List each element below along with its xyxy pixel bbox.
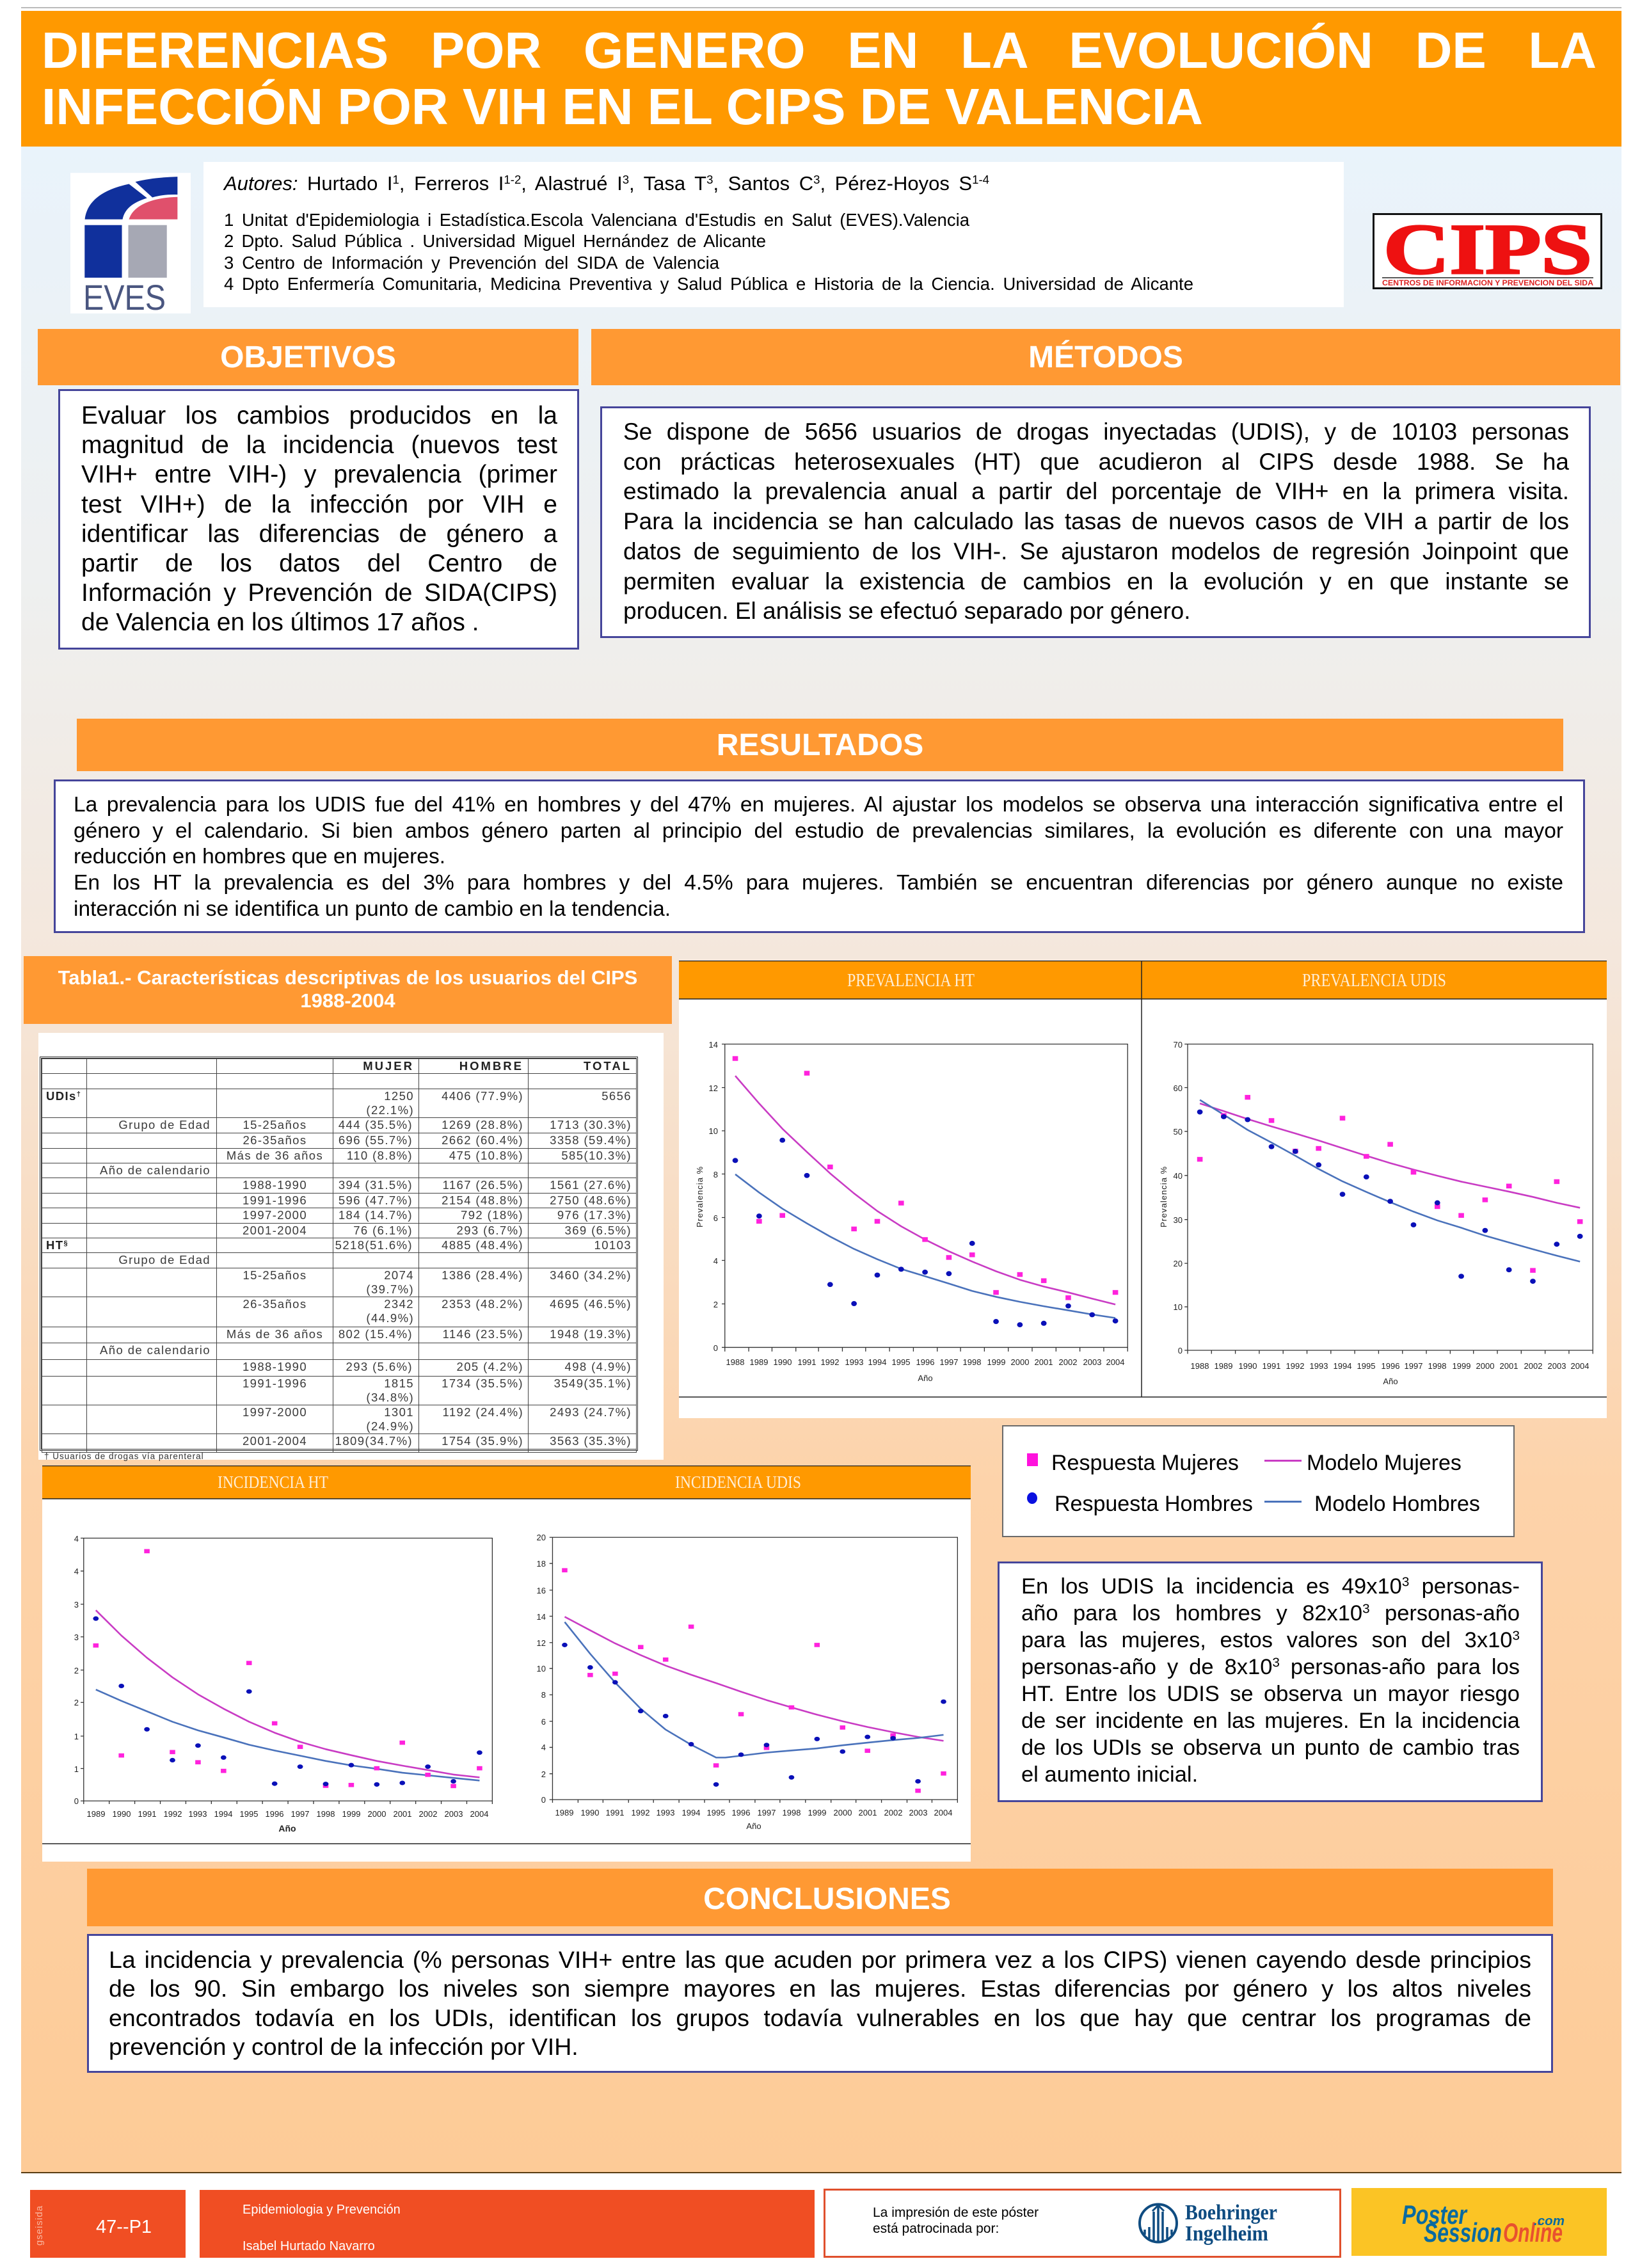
chart: incidencia UDIS: Año [746,1821,761,1831]
text: objetivos: identificar las diferencias de género a [81,520,557,548]
chart: prevalencia UDIS: 60 [1174,1083,1183,1093]
table section: HT: 1146 (23.5%) [443,1327,523,1341]
text: métodos: estimado la prevalencia anual a partir del porcentaje de VIH+ en la primera visita. [623,478,1569,504]
text: conclusiones [109,1946,1531,2060]
chart: prevalencia UDIS: 0 [1178,1346,1183,1355]
panel title: incidencia HT: INCIDENCIA HT [218,1473,328,1492]
table section: UDIs: 792 (18%) [461,1208,523,1222]
chart: incidencia HT: 0 [74,1796,79,1806]
table section: HT: 1386 (28.4%) [442,1268,523,1282]
chart: incidencia UDIS: 1997 [758,1808,776,1817]
table section: UDIs: 1988-1990 [243,1178,307,1192]
chart: prevalencia HT: Prevalencia % [695,1166,705,1227]
heading: tabla 1 [24,956,672,1024]
chart: incidencia UDIS: 1990 [581,1808,599,1817]
chart: incidencia HT: 2 [74,1666,79,1675]
text: métodos: permiten evaluar la existencia de cambios en la evolución y en que instante se [623,568,1569,595]
chart: prevalencia HT: 1995 [892,1357,910,1367]
text: incidencia explanation: HT. Entre los UDIS se observa un mayor riesgo [1021,1682,1520,1706]
chart: incidencia UDIS: 2000 [834,1808,852,1817]
chart: prevalencia UDIS: 1988 [1191,1361,1209,1371]
session code: 47--P1 [96,2217,152,2237]
chart: incidencia UDIS: 20 [537,1533,546,1542]
chart: prevalencia HT: 2001 [1035,1357,1053,1367]
chart: prevalencia HT: 6 [713,1213,718,1223]
table section: UDIs: 596 (47.7%) [339,1194,413,1207]
chart: incidencia UDIS: 2001 [859,1808,877,1817]
table section: HT: 3549(35.1%) [554,1377,632,1390]
panel title: prevalencia HT: PREVALENCIA HT [847,970,975,991]
text: resultados [74,793,1563,921]
text: conclusiones: La incidencia y prevalencia (% personas VIH+ entre las que acuden por primera vez a los CIPS) vienen cayendo desde principios [109,1946,1531,1973]
chart: prevalencia UDIS: 1993 [1310,1361,1328,1371]
chart: prevalencia UDIS: 1989 [1215,1361,1232,1371]
author: Isabel Hurtado Navarro [243,2239,375,2253]
table section: UDIs: 2154 (48.8%) [442,1194,523,1207]
chart: incidencia HT: Año [278,1823,296,1833]
table section: UDIs: 2662 (60.4%) [442,1133,523,1147]
panel: tabla 1 [38,1033,664,1460]
table section: UDIs: 1561 (27.6%) [550,1178,632,1192]
chart: incidencia UDIS: 1993 [657,1808,674,1817]
logo: Boehringer Ingelheim [1136,2198,1283,2249]
chart: incidencia HT: 2001 [394,1809,411,1819]
table section: UDIs: 3358 (59.4%) [550,1133,632,1147]
text: objetivos: de Valencia en los últimos 17 años . [81,609,479,636]
logo: PosterSessionOnline: .com [1534,2214,1565,2228]
text: objetivos: partir de los datos del Centro de [81,550,557,577]
chart: prevalencia HT: 1988 [726,1357,744,1367]
table section: HT: 2353 (48.2%) [442,1297,523,1311]
table section: HT: HT§ [46,1238,68,1252]
text: métodos: datos de seguimiento de los VIH-. Se ajustaron modelos de regresión Joinpoint que [623,538,1569,564]
authors panel [203,162,1344,307]
chart: incidencia UDIS: 2004 [934,1808,952,1817]
panel: resultados [54,779,1585,933]
text: resultados: interacción ni se identifica un punto de cambio en la tendencia. [74,897,671,921]
text: incidencia explanation: para las mujeres, estos valores son del 3x103 [1021,1628,1520,1652]
chart: incidencia HT: 2003 [445,1809,463,1819]
chart: prevalencia UDIS: 2001 [1500,1361,1518,1371]
chart: prevalencia UDIS: 2004 [1571,1361,1589,1371]
text: objetivos: Información y Prevención de SIDA(CIPS) [81,579,557,607]
table section: HT: 2342 (44.9%) [366,1297,414,1325]
sponsor text: está patrocinada por: [873,2221,999,2236]
chart: incidencia HT: 1999 [342,1809,360,1819]
heading: objetivos [38,329,578,385]
chart: incidencia UDIS: 8 [541,1690,546,1700]
vertical session label: gseisida [34,2205,45,2246]
chart: prevalencia HT: 2000 [1011,1357,1029,1367]
table section: UDIs: 444 (35.5%) [339,1118,413,1131]
table header: HOMBRE [459,1059,523,1073]
chart: prevalencia HT: Año [918,1373,933,1383]
heading: métodos: MÉTODOS [1028,340,1183,374]
chart: prevalencia HT: 1989 [750,1357,768,1367]
affiliations: 3 Centro de Información y Prevención del SIDA de Valencia [224,253,719,273]
table section: UDIs: Grupo de Edad [118,1118,211,1131]
chart: prevalencia HT: 10 [709,1126,718,1136]
chart: incidencia UDIS: 4 [541,1743,546,1752]
chart: incidencia HT: 1993 [189,1809,207,1819]
text: conclusiones: de los 90. Sin embargo los niveles son siempre mayores en las mujeres. Estas diferencias por género y los altos niveles [109,1975,1531,2002]
chart: incidencia UDIS: 2002 [884,1808,902,1817]
table section: UDIs: 1269 (28.8%) [442,1118,523,1131]
text: resultados: género y el calendario. Si bien ambos género parten al principio del estudio de prevalencias similares, la evolución es diferente con una mayor [74,819,1563,843]
chart: prevalencia UDIS: 1995 [1357,1361,1375,1371]
heading: tabla 1: 1988-2004 [300,989,395,1012]
table section: UDIs: 696 (55.7%) [339,1133,413,1147]
text: incidencia explanation: el aumento inicial. [1021,1762,1198,1787]
heading: resultados: RESULTADOS [717,728,923,762]
chart: prevalencia HT: 2002 [1059,1357,1077,1367]
table section: UDIs: 1991-1996 [243,1194,307,1207]
chart: prevalencia UDIS: 1999 [1453,1361,1470,1371]
affiliations: 2 Dpto. Salud Pública . Universidad Miguel Hernández de Alicante [224,231,766,251]
table section: HT: Más de 36 años [227,1327,323,1341]
chart panel: incidencia [42,1465,971,1862]
text: objetivos [81,402,557,636]
table section: UDIs: 26-35años [243,1133,307,1147]
chart: prevalencia HT: 1999 [987,1357,1005,1367]
chart: incidencia UDIS: 10 [537,1664,546,1673]
text: objetivos: Evaluar los cambios producidos en la [81,402,557,429]
chart: incidencia HT: 1990 [113,1809,131,1819]
table section: UDIs: 475 (10.8%) [449,1149,523,1162]
table section: HT: 1815 (34.8%) [366,1377,414,1404]
legend marker and label: respuesta mujeres: Respuesta Mujeres [1051,1451,1239,1475]
sponsor text [873,2205,1039,2237]
chart: incidencia UDIS: 1994 [682,1808,700,1817]
panel: métodos [600,406,1591,638]
chart: prevalencia UDIS: 40 [1174,1171,1183,1181]
table section: HT: 802 (15.4%) [339,1327,413,1341]
chart: incidencia UDIS [537,1533,957,1831]
chart: prevalencia HT: 1997 [940,1357,958,1367]
chart: incidencia HT: 2000 [368,1809,386,1819]
chart: incidencia HT: 1 [74,1732,79,1741]
chart: incidencia HT: 2002 [419,1809,437,1819]
chart: prevalencia UDIS: 1992 [1286,1361,1304,1371]
table section: HT: 2493 (24.7%) [550,1405,632,1419]
title text: INFECCIÓN POR VIH EN EL CIPS DE VALENCIA [42,78,1203,135]
chart: incidencia HT: 3 [74,1600,79,1609]
table section: HT: 4695 (46.5%) [550,1297,632,1311]
table footnote: † Usuarios de drogas vía parenteral [44,1451,204,1461]
table section: UDIs: 110 (8.8%) [347,1149,413,1162]
chart: prevalencia HT: 1998 [963,1357,981,1367]
chart: incidencia UDIS: 2 [541,1769,546,1779]
table section: HT: 2001-2004 [243,1434,307,1448]
table section: UDIs: 184 (14.7%) [339,1208,413,1222]
logo: EVES [70,173,191,314]
chart: prevalencia HT: 14 [709,1040,718,1050]
footer: topic and author [200,2190,815,2258]
text: conclusiones: encontrados todavía en los UDIs, identifican los grupos todavía vulnerables en los que hay que centrar los programas de [109,2004,1531,2031]
affiliations [224,210,1193,294]
text: resultados: La prevalencia para los UDIS fue del 41% en hombres y del 47% en mujeres. Al ajustar los modelos se observa una interacción significativa entre el [74,793,1563,817]
table section: UDIs: 2750 (48.6%) [550,1194,632,1207]
table section: UDIs: 976 (17.3%) [557,1208,632,1222]
logo: PosterSessionOnline: Session [1424,2217,1502,2248]
chart: incidencia HT: 4 [74,1567,79,1576]
chart: prevalencia HT: 0 [713,1343,718,1353]
footer: sponsor [824,2189,1341,2258]
chart: prevalencia HT: 1991 [798,1357,816,1367]
title banner [21,11,1621,147]
chart: incidencia UDIS: 2003 [909,1808,927,1817]
chart: incidencia HT: 1989 [87,1809,105,1819]
text: resultados: En los HT la prevalencia es del 3% para hombres y del 4.5% para mujeres. También se encuentran diferencias por género aunque no existe [74,871,1563,895]
heading: conclusiones: CONCLUSIONES [703,1881,951,1916]
chart: incidencia HT: 1997 [291,1809,309,1819]
chart: prevalencia HT: 2003 [1083,1357,1101,1367]
text: incidencia explanation: de los UDIs se observa un punto de cambio tras [1021,1736,1520,1760]
chart: prevalencia UDIS: 2002 [1524,1361,1542,1371]
chart: incidencia HT: 2 [74,1698,79,1707]
text: resultados: reducción en hombres que en mujeres. [74,845,445,868]
text: métodos: Para la incidencia se han calculado las tasas de nuevos casos de VIH a partir de los [623,508,1569,534]
chart: prevalencia UDIS: 10 [1174,1302,1183,1312]
chart: prevalencia UDIS: 30 [1174,1215,1183,1225]
legend marker and label: respuesta hombres: Respuesta Hombres [1055,1492,1253,1516]
table section: UDIs: 1713 (30.3%) [550,1118,632,1131]
text: incidencia explanation: año para los hombres y 82x103 personas-año [1021,1601,1520,1625]
table section: HT: 2074 (39.7%) [366,1268,414,1296]
table section: HT: 1192 (24.4%) [443,1405,523,1419]
title text: DIFERENCIAS POR GENERO EN LA EVOLUCIÓN DE LA [42,22,1597,79]
table section: HT: 1301 (24.9%) [366,1405,414,1433]
chart: incidencia HT [74,1534,492,1833]
legend line and label: modelo mujeres: Modelo Mujeres [1307,1451,1462,1475]
table section: HT: 1734 (35.5%) [442,1377,523,1390]
table section: UDIs: 4406 (77.9%) [442,1089,523,1103]
topic: Epidemiologia y Prevención [243,2203,401,2217]
table section: HT: 1997-2000 [243,1405,307,1419]
table section: HT: 3460 (34.2%) [550,1268,632,1282]
logo: Boehringer Ingelheim: Ingelheim [1185,2222,1268,2246]
table section: UDIs: 369 (6.5%) [564,1224,632,1237]
table header: TOTAL [584,1059,632,1073]
table header: MUJER [363,1059,414,1073]
chart: incidencia HT: 1995 [240,1809,258,1819]
table section: HT: 3563 (35.3%) [550,1434,632,1448]
chart: prevalencia HT [695,1040,1127,1383]
text: métodos: producen. El análisis se efectuó separado por género. [623,598,1191,624]
chart: incidencia UDIS: 1998 [783,1808,801,1817]
table section: UDIs: Año de calendario [100,1163,211,1177]
authors line: Autores: Hurtado I1, Ferreros I1-2, Alastrué I3, Tasa T3, Santos C3, Pérez-Hoyos S1-4 [224,172,989,195]
panel title: prevalencia UDIS: PREVALENCIA UDIS [1302,970,1446,991]
table section: UDIs: 293 (6.7%) [457,1224,523,1237]
text: objetivos: magnitud de la incidencia (nuevos test [81,431,557,459]
chart: prevalencia UDIS: 1996 [1382,1361,1399,1371]
chart: prevalencia UDIS: 20 [1174,1259,1183,1268]
chart: prevalencia UDIS: 1990 [1239,1361,1257,1371]
logo: CIPS: CENTROS DE INFORMACION Y PREVENCION DEL SIDA [1382,278,1593,287]
table section: HT: 1754 (35.9%) [442,1434,523,1448]
chart: incidencia HT: 1 [74,1764,79,1774]
chart: incidencia UDIS: 1991 [606,1808,624,1817]
chart: prevalencia UDIS: 2000 [1476,1361,1494,1371]
text: incidencia explanation: de ser incidente en las mujeres. En la incidencia [1021,1709,1520,1733]
table section: UDIs: 1997-2000 [243,1208,307,1222]
table section: HT: 4885 (48.4%) [442,1238,523,1252]
table section: UDIs [46,1089,632,1237]
chart: incidencia UDIS: 1995 [707,1808,725,1817]
chart: prevalencia HT: 2 [713,1300,718,1309]
chart: incidencia UDIS: 1989 [555,1808,573,1817]
chart: incidencia UDIS: 6 [541,1717,546,1727]
chart: incidencia UDIS: 12 [537,1638,546,1648]
chart: prevalencia UDIS: Prevalencia % [1159,1166,1168,1227]
table section: HT: 293 (5.6%) [346,1360,413,1373]
chart: prevalencia HT: 1992 [821,1357,839,1367]
table section: HT: 1991-1996 [243,1377,307,1390]
chart: incidencia UDIS: 1999 [808,1808,826,1817]
panel: conclusiones [87,1934,1553,2073]
chart: prevalencia UDIS: 50 [1174,1127,1183,1137]
chart: prevalencia HT: 1990 [774,1357,792,1367]
table section: UDIs: 1167 (26.5%) [443,1178,523,1192]
chart: incidencia HT: 3 [74,1633,79,1642]
chart: prevalencia HT: 12 [709,1083,718,1093]
title text [42,22,1597,135]
chart: incidencia HT: 1998 [317,1809,335,1819]
text: incidencia explanation: personas-año y de 8x103 personas-año para los [1021,1655,1520,1679]
text: métodos: con prácticas heterosexuales (HT) que acudieron al CIPS desde 1988. Se ha [623,449,1569,475]
table section: HT: 498 (4.9%) [564,1360,632,1373]
chart: prevalencia HT: 2004 [1106,1357,1124,1367]
table section: HT: Año de calendario [100,1343,211,1357]
heading: tabla 1: Tabla1.- Características descriptivas de los usuarios del CIPS [58,966,637,989]
table section: UDIs: 5656 [601,1089,632,1103]
text: métodos: Se dispone de 5656 usuarios de drogas inyectadas (UDIS), y de 10103 personas [623,419,1569,445]
chart: incidencia HT: 1994 [214,1809,232,1819]
heading: conclusiones [87,1869,1553,1926]
chart: incidencia HT: 1996 [266,1809,283,1819]
legend line and label: modelo hombres: Modelo Hombres [1314,1492,1480,1516]
chart: incidencia UDIS: 18 [537,1559,546,1569]
table section: HT: 1988-1990 [243,1360,307,1373]
chart: incidencia HT: 1992 [164,1809,182,1819]
chart: incidencia UDIS: 1992 [632,1808,649,1817]
panel: objetivos [58,389,579,650]
table section: UDIs: 15-25años [243,1118,307,1131]
table section: HT: 1948 (19.3%) [550,1327,632,1341]
table section: HT: 10103 [594,1238,632,1252]
sponsor text: La impresión de este póster [873,2205,1039,2220]
table: características descriptivas [40,1057,638,1451]
table section: HT: 15-25años [243,1268,307,1282]
chart: prevalencia UDIS: 1994 [1334,1361,1351,1371]
logo: PosterSessionOnline [1351,2188,1607,2256]
table section: UDIs: 394 (31.5%) [339,1178,413,1192]
table section: UDIs: 585(10.3%) [561,1149,632,1162]
heading: objetivos: OBJETIVOS [220,340,396,374]
text: incidencia explanation [1021,1574,1520,1787]
text: incidencia explanation: En los UDIS la incidencia es 49x103 personas- [1021,1574,1520,1599]
table section: HT: Grupo de Edad [118,1253,211,1266]
heading: resultados [77,719,1563,771]
chart: incidencia HT: 2004 [470,1809,488,1819]
heading: métodos [591,329,1620,385]
logo: PosterSessionOnline: Online [1503,2217,1563,2248]
legend [1002,1425,1515,1537]
text: métodos [623,419,1569,624]
chart: prevalencia HT: 4 [713,1256,718,1266]
table section: UDIs: UDIs† [46,1089,81,1103]
chart: prevalencia UDIS: Año [1383,1377,1398,1386]
footer: poster number [30,2190,186,2258]
chart: prevalencia UDIS: 70 [1174,1040,1183,1050]
table header [363,1059,632,1073]
logo: PosterSessionOnline: Poster [1402,2200,1468,2230]
table section: HT: 5218(51.6%) [335,1238,413,1252]
table section: UDIs: Más de 36 años [227,1149,323,1162]
table section: UDIs: 2001-2004 [243,1224,307,1237]
table section: UDIs: 1250 (22.1%) [366,1089,414,1117]
table section: HT: 1809(34.7%) [335,1434,413,1448]
chart: prevalencia HT: 1994 [868,1357,886,1367]
table section: HT [46,1238,632,1448]
panel title: incidencia UDIS: INCIDENCIA UDIS [675,1473,801,1492]
chart: prevalencia HT: 8 [713,1170,718,1179]
chart: incidencia UDIS: 1996 [732,1808,750,1817]
panel: incidencia explanation [998,1561,1543,1802]
chart: prevalencia HT: 1993 [845,1357,863,1367]
table section: HT: 26-35años [243,1297,307,1311]
chart: prevalencia UDIS: 1998 [1428,1361,1446,1371]
text: objetivos: test VIH+) de la infección por VIH e [81,491,557,518]
chart: prevalencia UDIS: 2003 [1548,1361,1566,1371]
chart: prevalencia UDIS [1159,1040,1593,1386]
table section: HT: 205 (4.2%) [457,1360,523,1373]
chart: incidencia HT: 1991 [138,1809,156,1819]
chart: prevalencia UDIS: 1997 [1405,1361,1422,1371]
chart: incidencia UDIS: 16 [537,1586,546,1595]
chart: incidencia UDIS: 0 [541,1795,546,1805]
text: conclusiones: prevención y control de la infección por VIH. [109,2033,578,2060]
table section: UDIs: 76 (6.1%) [353,1224,413,1237]
chart: incidencia UDIS: 14 [537,1612,546,1622]
chart: prevalencia UDIS: 1991 [1263,1361,1280,1371]
affiliations: 4 Dpto Enfermería Comunitaria, Medicina Preventiva y Salud Pública e Historia de la Ciencia. Universidad de Alicante [224,274,1193,294]
top rule [21,7,1621,8]
chart panel: prevalencia [679,961,1607,1418]
chart: prevalencia HT: 1996 [916,1357,934,1367]
text: objetivos: VIH+ entre VIH-) y prevalencia (primer [81,461,557,488]
chart: incidencia HT: 4 [74,1534,79,1544]
affiliations: 1 Unitat d'Epidemiologia i Estadística.Escola Valenciana d'Estudis en Salut (EVES).Valencia [224,210,969,230]
